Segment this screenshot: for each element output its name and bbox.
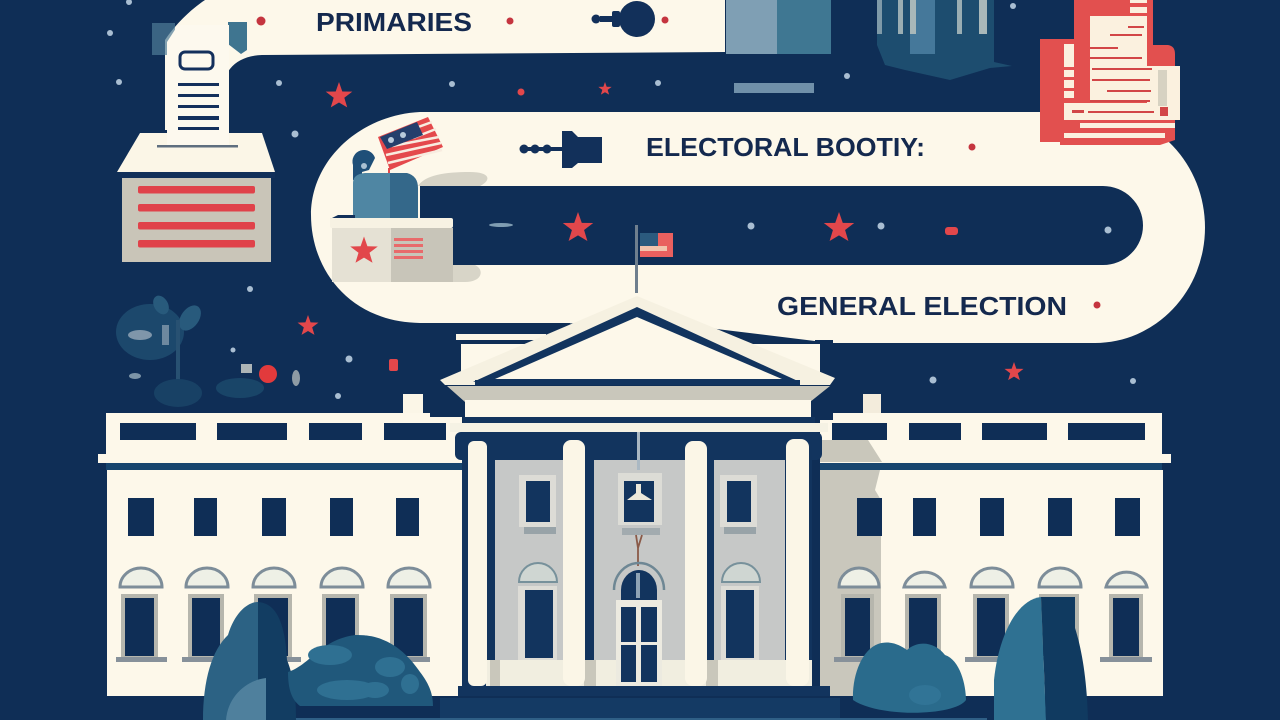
ribbon path: electoral and general election band	[311, 112, 1205, 343]
heading: general election: GENERAL ELECTION	[777, 291, 1067, 321]
steps	[458, 686, 830, 700]
icon: plug connector	[520, 131, 602, 168]
heading: electoral booth: ELECTORAL BOOTIY:	[646, 132, 925, 162]
faded capitol silhouette	[877, 0, 1012, 80]
centre window and lamp	[618, 473, 662, 525]
flag	[378, 117, 443, 170]
attic	[430, 323, 823, 346]
round bush	[853, 643, 966, 713]
ground band	[0, 696, 1280, 720]
white house: central portico	[430, 296, 835, 700]
ballot box roof	[117, 133, 275, 172]
right shrubs	[853, 597, 1088, 720]
pediment	[440, 296, 835, 385]
ballot box body	[122, 178, 271, 262]
icon: ballot box with paper	[117, 22, 275, 262]
ballot paper	[167, 25, 229, 146]
left shrubs	[203, 602, 433, 720]
tall bush	[203, 602, 258, 720]
round bush	[288, 635, 433, 706]
cornice	[447, 386, 830, 402]
icon: flag on the white house	[635, 225, 673, 293]
right window pair	[720, 475, 757, 527]
icon: top key	[592, 1, 655, 37]
column base plinth	[486, 660, 616, 686]
icon: red document stack	[1040, 0, 1180, 145]
centre door	[614, 563, 664, 590]
columns	[468, 439, 809, 686]
faded tree and shrubs	[116, 293, 300, 407]
starfield: dots and stars	[107, 0, 1136, 399]
tall bush	[994, 597, 1046, 720]
navy frame and grey wall	[455, 432, 822, 460]
left window pair	[519, 475, 556, 527]
icon: blue building top centre	[726, 0, 831, 93]
white house: right wing	[820, 394, 1171, 696]
icon: voting booth with flag and star	[330, 117, 487, 282]
white house: left wing	[98, 394, 462, 696]
ribbon path: primaries band	[165, 0, 725, 130]
heading: primaries: PRIMARIES	[316, 7, 472, 37]
ribbon red dots	[256, 16, 1100, 308]
